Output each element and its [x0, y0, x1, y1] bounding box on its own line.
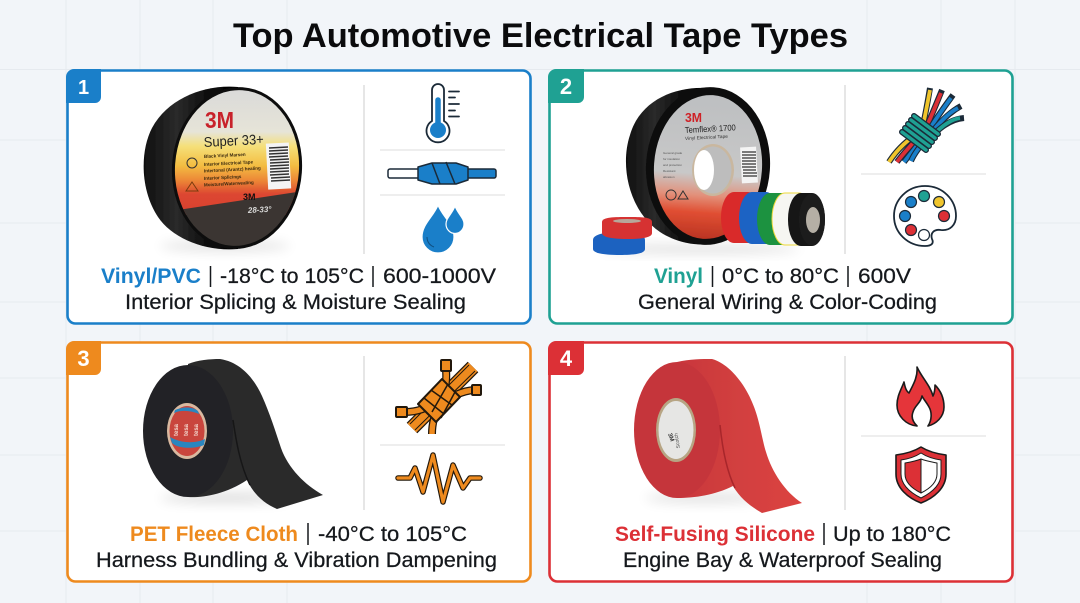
badge 3: [66, 341, 101, 375]
caption 1: [101, 265, 496, 314]
small red roll: [721, 192, 761, 243]
core: [656, 398, 696, 462]
badge 2: 2: [560, 74, 572, 99]
icon: wire splice: [388, 162, 496, 184]
title: Top Automotive Electrical Tape Types: [233, 17, 848, 55]
tape roll: 3M Temflex 1700 with colored rolls: Temflex® 1700: [685, 122, 736, 135]
small blue roll: [739, 192, 779, 244]
icon: water drops: [422, 205, 464, 253]
tape roll: 3M Temflex 1700 with colored rolls: abrasion: [663, 175, 675, 179]
tape roll: 3M Temflex 1700 with colored rolls: Vinyl Electrical Tape: [685, 134, 729, 141]
caption 3: [96, 523, 497, 572]
badge 4: [548, 341, 584, 375]
tape roll: 3M Super 33+: Moisture/Waterwealing: [204, 180, 254, 187]
caption 2: 0°C to 80°C: [722, 265, 839, 288]
core hole: [692, 144, 734, 196]
caption 2: General Wiring & Color-Coding: [638, 291, 937, 314]
caption 2: [638, 265, 937, 314]
icon: thermometer: [427, 84, 459, 142]
small green roll: [757, 193, 797, 245]
icon: color palette: [894, 186, 956, 246]
icon: shield: [896, 447, 946, 503]
core: Scotch: [673, 432, 682, 449]
flat blue roll: [593, 232, 645, 255]
caption 3: Harness Bundling & Vibration Dampening: [96, 549, 497, 572]
tape roll: red silicone: [634, 359, 802, 513]
core: 3M: [666, 433, 675, 443]
tape roll: 3M Temflex 1700 with colored rolls: 3M: [685, 110, 702, 125]
tape roll: 3M Super 33+: 3M: [205, 107, 234, 133]
barcode: [266, 142, 291, 190]
badge 1: 1: [78, 77, 89, 99]
panel: 3 PET Fleece Cloth: [66, 341, 530, 582]
tape roll: black fleece: [143, 359, 323, 509]
caption 1: -18°C to 105°C: [220, 265, 364, 288]
caption 4: Engine Bay & Waterproof Sealing: [623, 549, 942, 572]
tape roll: 3M Super 33+: Black Vinyl Marsen: [204, 152, 246, 159]
tape roll: 3M Temflex 1700 with colored rolls: General grade: [663, 151, 683, 155]
caption 2: Vinyl: [654, 265, 703, 288]
icon: color-coded wire bundle: [889, 88, 964, 162]
tape roll: 3M Super 33+: Super 33+: [203, 131, 264, 150]
tape roll: 3M Super 33+: [144, 83, 310, 260]
tape roll: 3M Temflex 1700 with colored rolls: [593, 83, 825, 255]
badge 4: 4: [560, 346, 573, 371]
panel: 2 Vinyl: [548, 69, 1012, 324]
core label: tesa: [174, 423, 180, 436]
panel: 4 Self-Fusing Silicone: [548, 341, 1012, 582]
caption 3: -40°C to 105°C: [318, 523, 467, 546]
caption 1: Interior Splicing & Moisture Sealing: [125, 291, 466, 314]
caption 2: 600V: [858, 265, 911, 288]
flat red roll: [602, 217, 652, 239]
tape roll: 3M Super 33+: Intertonal (Arantz) healing: [204, 166, 261, 173]
tape roll: 3M Temflex 1700 with colored rolls: Resistant: [663, 169, 676, 173]
caption 4: Self-Fusing Silicone: [615, 523, 815, 546]
tape roll: 3M Super 33+: 3M: [243, 192, 256, 202]
tape roll: 3M Super 33+: Interior Electrical Tape: [204, 159, 254, 167]
tape roll: 3M Temflex 1700 with colored rolls: for insulation: [663, 157, 680, 161]
icon: bundled harness: [396, 360, 481, 434]
badge 2: [548, 69, 584, 103]
caption 4: Up to 180°C: [833, 523, 951, 546]
icon: flame: [897, 367, 944, 426]
small black roll: [788, 193, 825, 246]
badge 3: 3: [77, 346, 90, 371]
core label: [167, 403, 207, 459]
barcode: [740, 147, 758, 183]
tape roll: 3M Temflex 1700 with colored rolls: and protection: [663, 163, 682, 167]
tape roll: 3M Super 33+: Interior Splicings: [204, 174, 242, 181]
tape roll: 3M Super 33+: 28-33°: [247, 205, 273, 215]
caption 1: Vinyl/PVC: [101, 265, 201, 288]
caption 1: 600-1000V: [383, 265, 496, 288]
icon: vibration wave: [398, 455, 480, 502]
core label: tesa: [184, 423, 190, 436]
badge 1: [66, 69, 101, 103]
core label: tesa: [194, 423, 200, 436]
panel: 1 Vinyl/PVC: [66, 69, 530, 324]
caption 3: PET Fleece Cloth: [130, 523, 298, 546]
small white roll: [772, 193, 812, 245]
caption 4: [615, 523, 951, 572]
